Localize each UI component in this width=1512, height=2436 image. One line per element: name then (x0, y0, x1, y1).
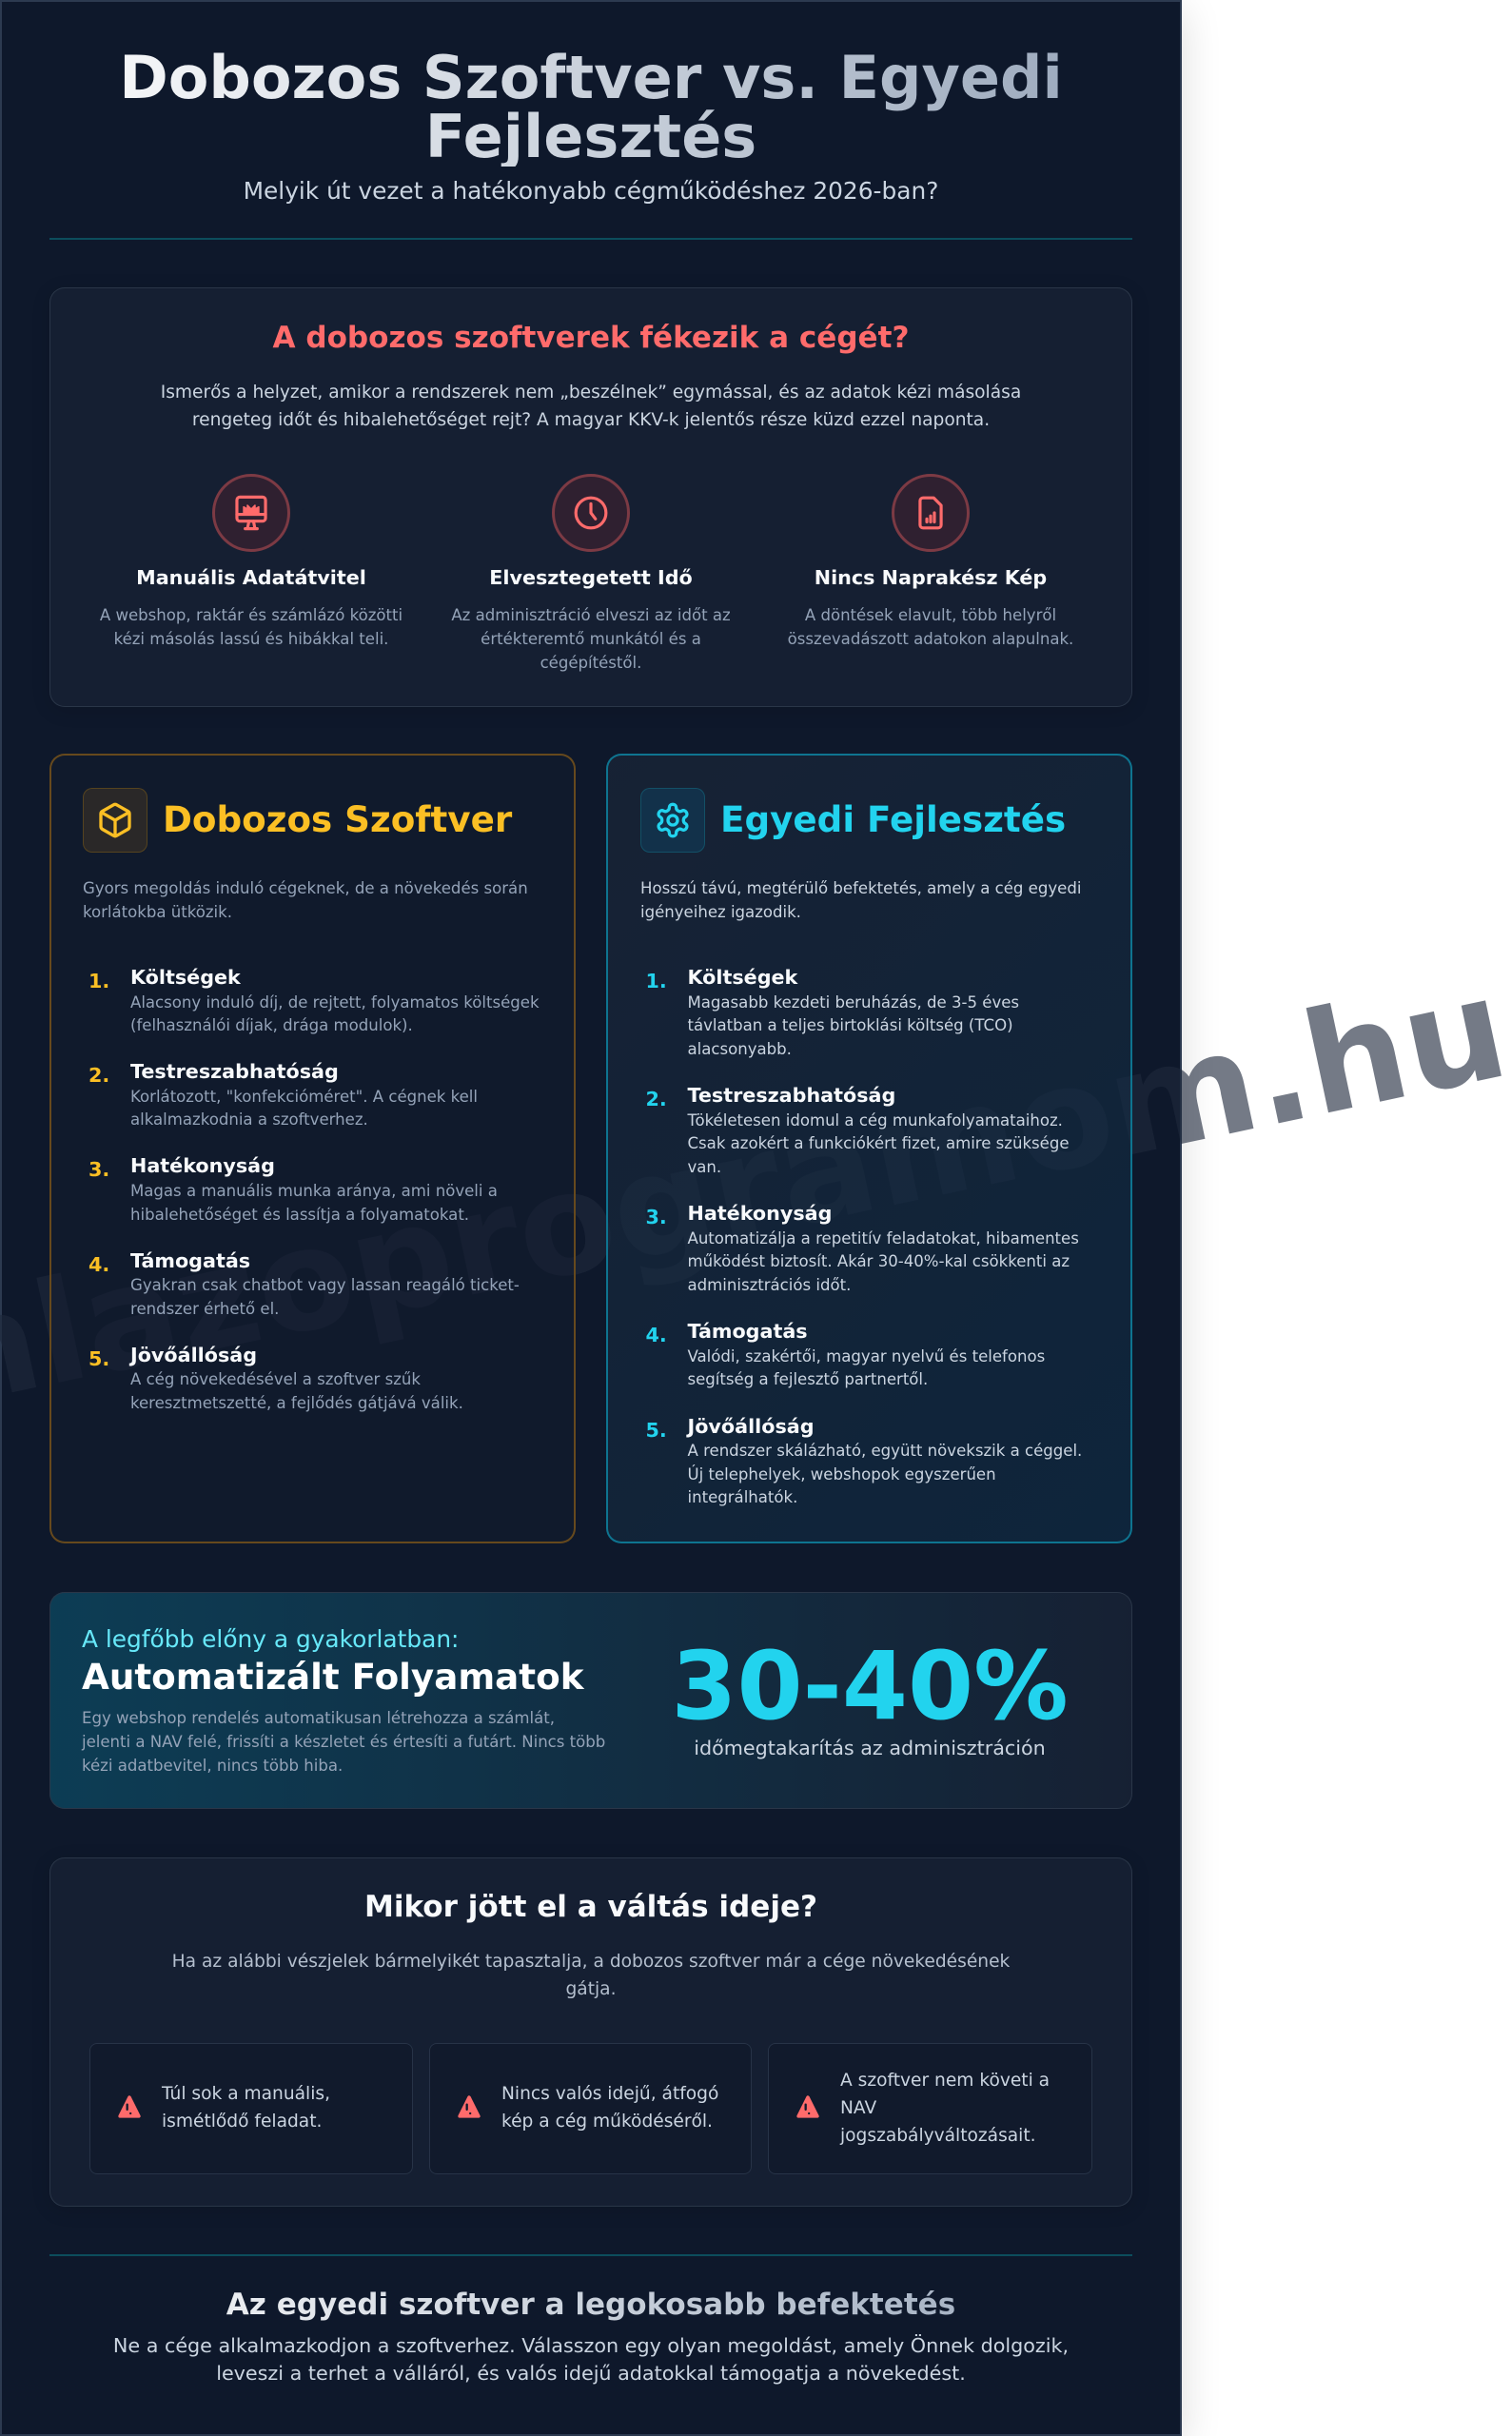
warning card 3 (768, 2043, 1092, 2174)
intro (83, 879, 528, 921)
point 1: Költségek (130, 966, 241, 989)
pain point: manual data: Manuális Adatátvitel (136, 566, 366, 589)
footer text: Ne a cége alkalmazkodjon a szoftverhez. Válasszon egy olyan megoldást, amely Önnek dolgozik, (113, 2333, 1069, 2356)
subtitle: Melyik út vezet a hatékonyabb cégműködéshez 2026-ban? (244, 177, 938, 205)
point 1: távlatban a teljes birtoklási költség (TCO) (687, 1016, 1013, 1034)
footer heading: Az egyedi szoftver a legokosabb befektetés (226, 2288, 955, 2322)
point 2: Testreszabhatóság (130, 1060, 339, 1083)
panel: key benefit (49, 1592, 1132, 1809)
point 4: Támogatás (130, 1249, 250, 1272)
stat number: 30-40% (671, 1632, 1069, 1741)
point 4: 4. (88, 1253, 109, 1276)
point 5: A rendszer skálázható, együtt növekszik a céggel. (687, 1442, 1082, 1460)
point 4: segítség a fejlesztő partnertől. (687, 1370, 928, 1388)
point 5: keresztmetszetté, a fejlődés gátjává válik. (130, 1394, 463, 1412)
panel: when to switch (49, 1857, 1132, 2207)
title (2, 49, 1180, 167)
point 1: Magasabb kezdeti beruházás, de 3-5 éves (687, 993, 1019, 1011)
pain point: no current picture: Nincs Naprakész Kép (815, 566, 1047, 589)
pain point: lost time: Elvesztegetett Idő (489, 566, 693, 589)
point 3: Automatizálja a repetitív feladatokat, hibamentes (687, 1229, 1079, 1247)
switch intro: gátja. (565, 1979, 617, 1998)
point 1: Alacsony induló díj, de rejtett, folyamatos költségek (130, 993, 540, 1011)
point 5: Új telephelyek, webshopok egyszerűen (687, 1465, 996, 1483)
icon: warning (458, 2095, 481, 2118)
intro: igényeihez igazodik. (640, 902, 801, 921)
point 4 (88, 1249, 520, 1318)
point 4: 4. (645, 1324, 667, 1346)
icon: monitor (212, 474, 290, 552)
point 3 (645, 1202, 1079, 1294)
point 3: adminisztrációs időt. (687, 1276, 851, 1294)
switch intro (172, 1951, 1011, 1998)
benefit description (82, 1709, 605, 1774)
point 5: 5. (645, 1418, 667, 1441)
panel: problem (49, 287, 1132, 707)
warning card 2: kép a cég működéséről. (501, 2112, 713, 2132)
point 3: Hatékonyság (687, 1202, 832, 1225)
point 3: Hatékonyság (130, 1154, 275, 1177)
intro (640, 879, 1081, 921)
page background (0, 0, 1182, 2436)
point 5 (88, 1344, 463, 1412)
list: custom development points (645, 966, 1082, 1506)
warning card 3: A szoftver nem követi a (840, 2071, 1050, 2090)
point 1: Költségek (687, 966, 797, 989)
pain point: manual data (100, 474, 403, 648)
benefit label: A legfőbb előny a gyakorlatban: (82, 1625, 459, 1653)
point 2 (88, 1060, 478, 1129)
point 4: Gyakran csak chatbot vagy lassan reagáló ticket- (130, 1276, 520, 1294)
icon: clock (552, 474, 630, 552)
point 1 (645, 966, 1019, 1058)
point 2: Testreszabhatóság (687, 1084, 895, 1107)
title: Fejlesztés (425, 102, 756, 171)
panel: custom development (606, 754, 1132, 1543)
point 2: Korlátozott, "konfekcióméret". A cégnek kell (130, 1088, 478, 1106)
point 2 (645, 1084, 1070, 1176)
point 1: 1. (88, 970, 109, 992)
pain point: manual data: A webshop, raktár és számlázó közötti (100, 606, 403, 624)
footer (113, 2288, 1069, 2385)
warning card 1: Túl sok a manuális, (162, 2084, 330, 2104)
icon: box (83, 788, 147, 853)
benefit description: jelenti a NAV felé, frissíti a készletet és értesíti a futárt. Nincs több (82, 1732, 605, 1751)
header (119, 43, 1063, 205)
intro: Gyors megoldás induló cégeknek, de a növekedés során (83, 879, 528, 896)
problem heading: A dobozos szoftverek fékezik a cégét? (273, 321, 909, 355)
icon: warning (118, 2095, 141, 2118)
pain point: lost time: értékteremtő munkától és a (481, 630, 701, 648)
point 4: Valódi, szakértői, magyar nyelvű és telefonos (687, 1347, 1045, 1365)
point 1 (88, 966, 540, 1034)
warning card 1: ismétlődő feladat. (162, 2112, 322, 2132)
footer text (113, 2333, 1069, 2385)
point 3: működést biztosít. Akár 30-40%-kal csökkenti az (687, 1252, 1070, 1270)
warning card 3: NAV (840, 2097, 876, 2118)
benefit heading: Automatizált Folyamatok (82, 1656, 583, 1698)
pain point: lost time (451, 474, 731, 672)
point 5: Jövőállóság (687, 1414, 815, 1437)
pain point: no current picture (788, 474, 1073, 648)
point 1: (felhasználói díjak, drága modulok). (130, 1016, 413, 1034)
point 3: 3. (88, 1158, 109, 1181)
point 4 (645, 1320, 1045, 1388)
point 4: Támogatás (687, 1320, 808, 1343)
point 3: Magas a manuális munka aránya, ami növeli a (130, 1182, 498, 1200)
header divider (49, 238, 1132, 240)
point 2: Csak azokért a funkciókért fizet, amire szüksége (687, 1134, 1070, 1152)
point 3 (88, 1154, 498, 1224)
point 1: alacsonyabb. (687, 1040, 792, 1058)
benefit description: Egy webshop rendelés automatikusan létrehozza a számlát, (82, 1709, 555, 1726)
warning card 1 (89, 2043, 413, 2174)
pain point: no current picture: összevadászott adatokon alapulnak. (788, 630, 1073, 648)
point 3: hibalehetőséget és lassítja a folyamatokat. (130, 1206, 469, 1224)
point 2: 2. (645, 1088, 667, 1110)
warning card 3: jogszabályváltozásait. (840, 2126, 1036, 2145)
pain point: no current picture: A döntések elavult, több helyről (805, 606, 1056, 624)
switch heading: Mikor jött el a váltás ideje? (364, 1890, 817, 1924)
switch intro: Ha az alábbi vészjelek bármelyikét tapasztalja, a dobozos szoftver már a cége növekedésének (172, 1951, 1010, 1972)
intro: korlátokba ütközik. (83, 902, 232, 921)
icon: report file (892, 474, 970, 552)
pain point: lost time: Az adminisztráció elveszi az időt az (451, 606, 731, 624)
heading: Egyedi Fejlesztés (720, 798, 1066, 840)
stat: 30-40% (671, 1632, 1069, 1759)
heading: Dobozos Szoftver (163, 798, 512, 840)
point 5: Jövőállóság (130, 1344, 257, 1366)
footer heading (2, 2284, 1180, 2326)
point 5: A cég növekedésével a szoftver szűk (130, 1370, 421, 1388)
point 4: rendszer érhető el. (130, 1300, 279, 1318)
point 5: 5. (88, 1347, 109, 1370)
point 2: Tökéletesen idomul a cég munkafolyamataihoz. (687, 1111, 1063, 1129)
icon: gear (640, 788, 705, 853)
point 5: integrálhatók. (687, 1488, 797, 1506)
pain point: manual data: kézi másolás lassú és hibákkal teli. (114, 630, 388, 648)
stat caption: időmegtakarítás az adminisztráción (694, 1737, 1046, 1759)
point 1: 1. (645, 970, 667, 992)
list: boxed software points (88, 966, 540, 1412)
footer divider (49, 2254, 1132, 2256)
panel: boxed software (49, 754, 576, 1543)
icon: warning (796, 2095, 819, 2118)
warning card 2 (429, 2043, 752, 2174)
footer text: leveszi a terhet a válláról, és valós idejű adatokkal támogatja a növekedést. (216, 2362, 966, 2385)
point 2: van. (687, 1158, 721, 1176)
point 2: alkalmazkodnia a szoftverhez. (130, 1110, 368, 1129)
problem intro: Ismerős a helyzet, amikor a rendszerek nem „beszélnek” egymással, és az adatok kézi másolása (161, 383, 1021, 402)
point 5 (645, 1414, 1082, 1506)
warning card 2: Nincs valós idejű, átfogó (501, 2084, 718, 2104)
benefit description: kézi adatbevitel, nincs több hiba. (82, 1757, 343, 1774)
intro: Hosszú távú, megtérülő befektetés, amely a cég egyedi (640, 879, 1081, 896)
problem intro (161, 383, 1021, 430)
point 2: 2. (88, 1064, 109, 1087)
point 3: 3. (645, 1206, 667, 1228)
pain point: lost time: cégépítéstől. (540, 654, 641, 672)
problem intro: rengeteg időt és hibalehetőséget rejt? A magyar KKV-k jelentős része küzd ezzel naponta. (192, 409, 990, 430)
title: Dobozos Szoftver vs. Egyedi (119, 43, 1063, 112)
